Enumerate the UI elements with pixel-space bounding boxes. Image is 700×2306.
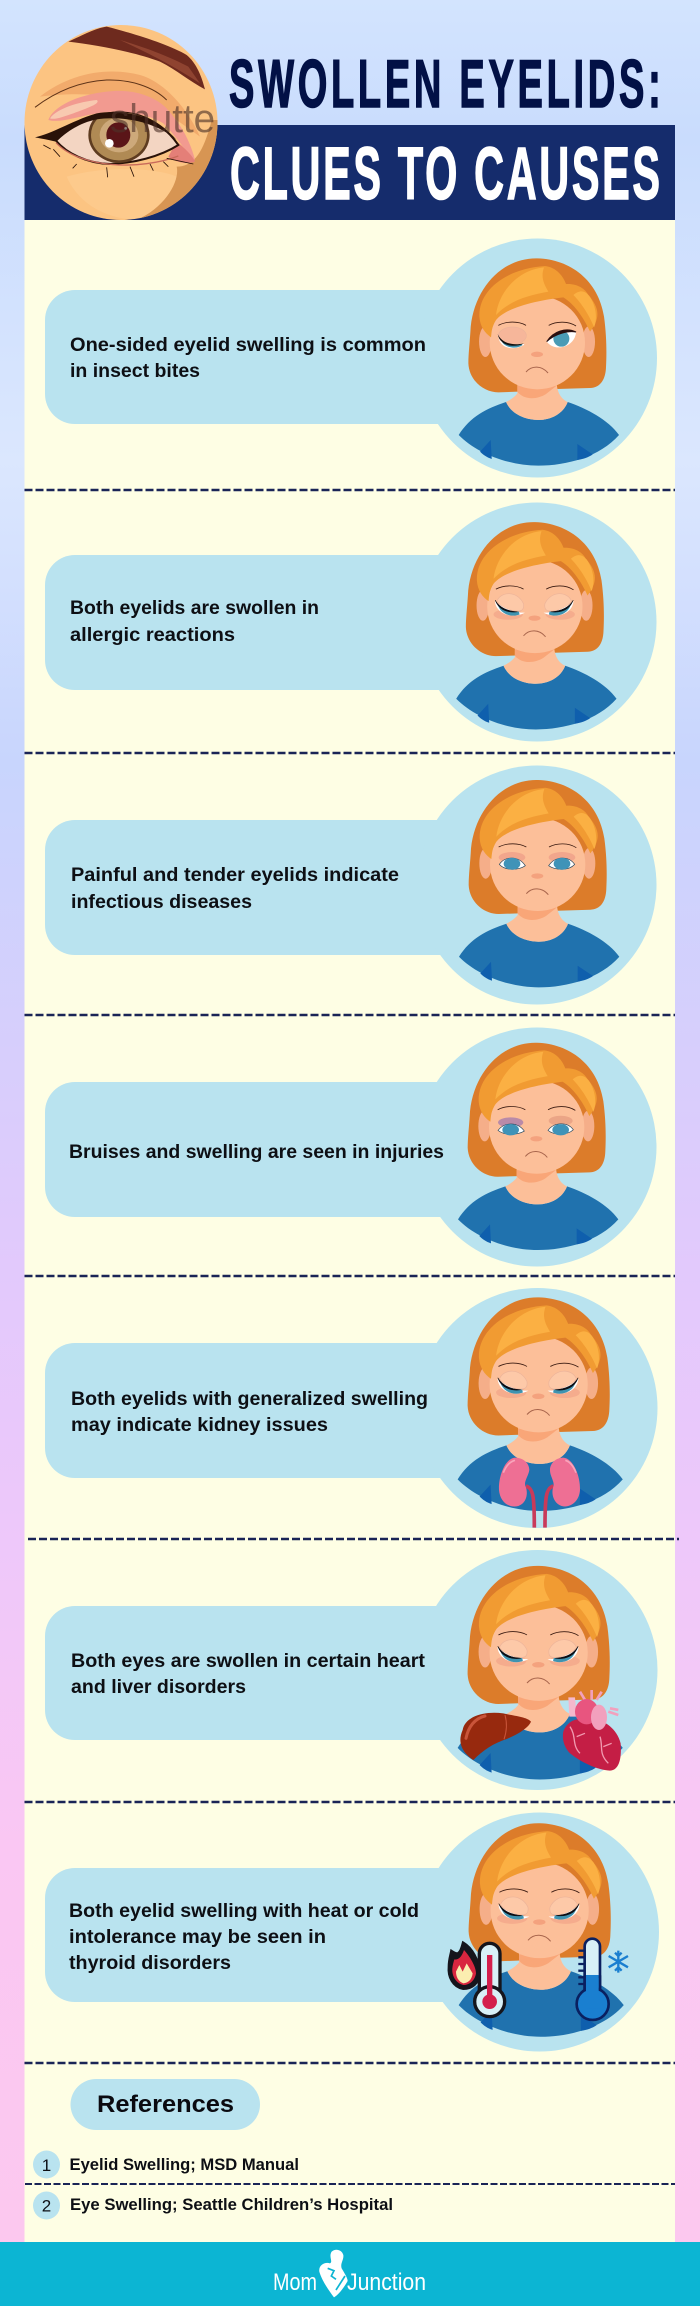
callout bubble (45, 555, 450, 690)
reference 1 (33, 2150, 299, 2178)
reference 2: 2 (42, 2196, 51, 2216)
logo: Mom (273, 2269, 317, 2296)
reference 1: 1 (42, 2156, 51, 2175)
circle (418, 502, 656, 742)
girl with tender eyelids (459, 780, 619, 987)
footer bar (0, 2242, 700, 2306)
references heading (70, 2079, 260, 2130)
text: in insect bites (70, 361, 200, 382)
row 1 (45, 238, 657, 478)
text: Both eyelids are swollen in (70, 598, 319, 619)
girl with one swollen eye (459, 258, 619, 466)
callout bubble (45, 820, 450, 955)
reference 2: Eye Swelling; Seattle Children’s Hospital (70, 2196, 393, 2214)
text: and liver disorders (71, 1677, 246, 1698)
logo: Junction (347, 2269, 426, 2296)
text: thyroid disorders (69, 1953, 231, 1974)
text: allergic reactions (70, 625, 235, 646)
circle (418, 1028, 656, 1266)
reference 2 (33, 2192, 393, 2220)
text: Painful and tender eyelids indicate (71, 865, 399, 886)
circle (420, 1812, 659, 2052)
row 4 (45, 1028, 656, 1266)
text: intolerance may be seen in (69, 1927, 326, 1948)
row 2 (45, 502, 656, 742)
girl with swollen eyelids (458, 1297, 623, 1511)
row 5 (45, 1288, 658, 1528)
icon: kidneys (499, 1458, 580, 1528)
text: may indicate kidney issues (71, 1415, 328, 1436)
text: Bruises and swelling are seen in injuries (69, 1142, 444, 1163)
watermark: shutter (110, 97, 228, 141)
text: Both eyes are swollen in certain heart (71, 1651, 426, 1672)
eye illustration (24, 25, 218, 220)
girl with bruised eye (458, 1043, 618, 1250)
row 3 (45, 766, 656, 1004)
references heading: References (97, 2091, 234, 2118)
icon: heart (563, 1690, 621, 1771)
logo (273, 2250, 426, 2297)
callout bubble (45, 1606, 450, 1740)
icon: liver (460, 1713, 531, 1760)
text: infectious diseases (71, 892, 252, 913)
circle (418, 1288, 658, 1528)
title line 1: SWOLLEN EYELIDS: (229, 45, 661, 122)
row 7 (45, 1812, 659, 2052)
circle (418, 1550, 658, 1790)
reference 1: Eyelid Swelling; MSD Manual (70, 2156, 299, 2174)
row 6 (45, 1550, 658, 1790)
girl with swollen eyes (459, 1823, 624, 2037)
text: Both eyelids with generalized swelling (71, 1389, 428, 1410)
callout bubble (45, 290, 450, 424)
text: Both eyelid swelling with heat or cold (69, 1901, 419, 1922)
callout bubble (45, 1082, 450, 1217)
text: One-sided eyelid swelling is common (70, 335, 426, 356)
callout bubble (45, 1343, 450, 1478)
icon: cold thermometer and snowflake (577, 1939, 628, 2020)
girl with both eyelids swollen (456, 522, 617, 729)
circle (418, 766, 656, 1004)
girl with swollen eyes (458, 1566, 623, 1779)
title line 2: CLUES TO CAUSES (230, 132, 660, 215)
title banner (24, 125, 675, 220)
callout bubble (45, 1868, 450, 2002)
icon: fire and hot thermometer (449, 1943, 505, 2017)
circle (418, 238, 657, 478)
